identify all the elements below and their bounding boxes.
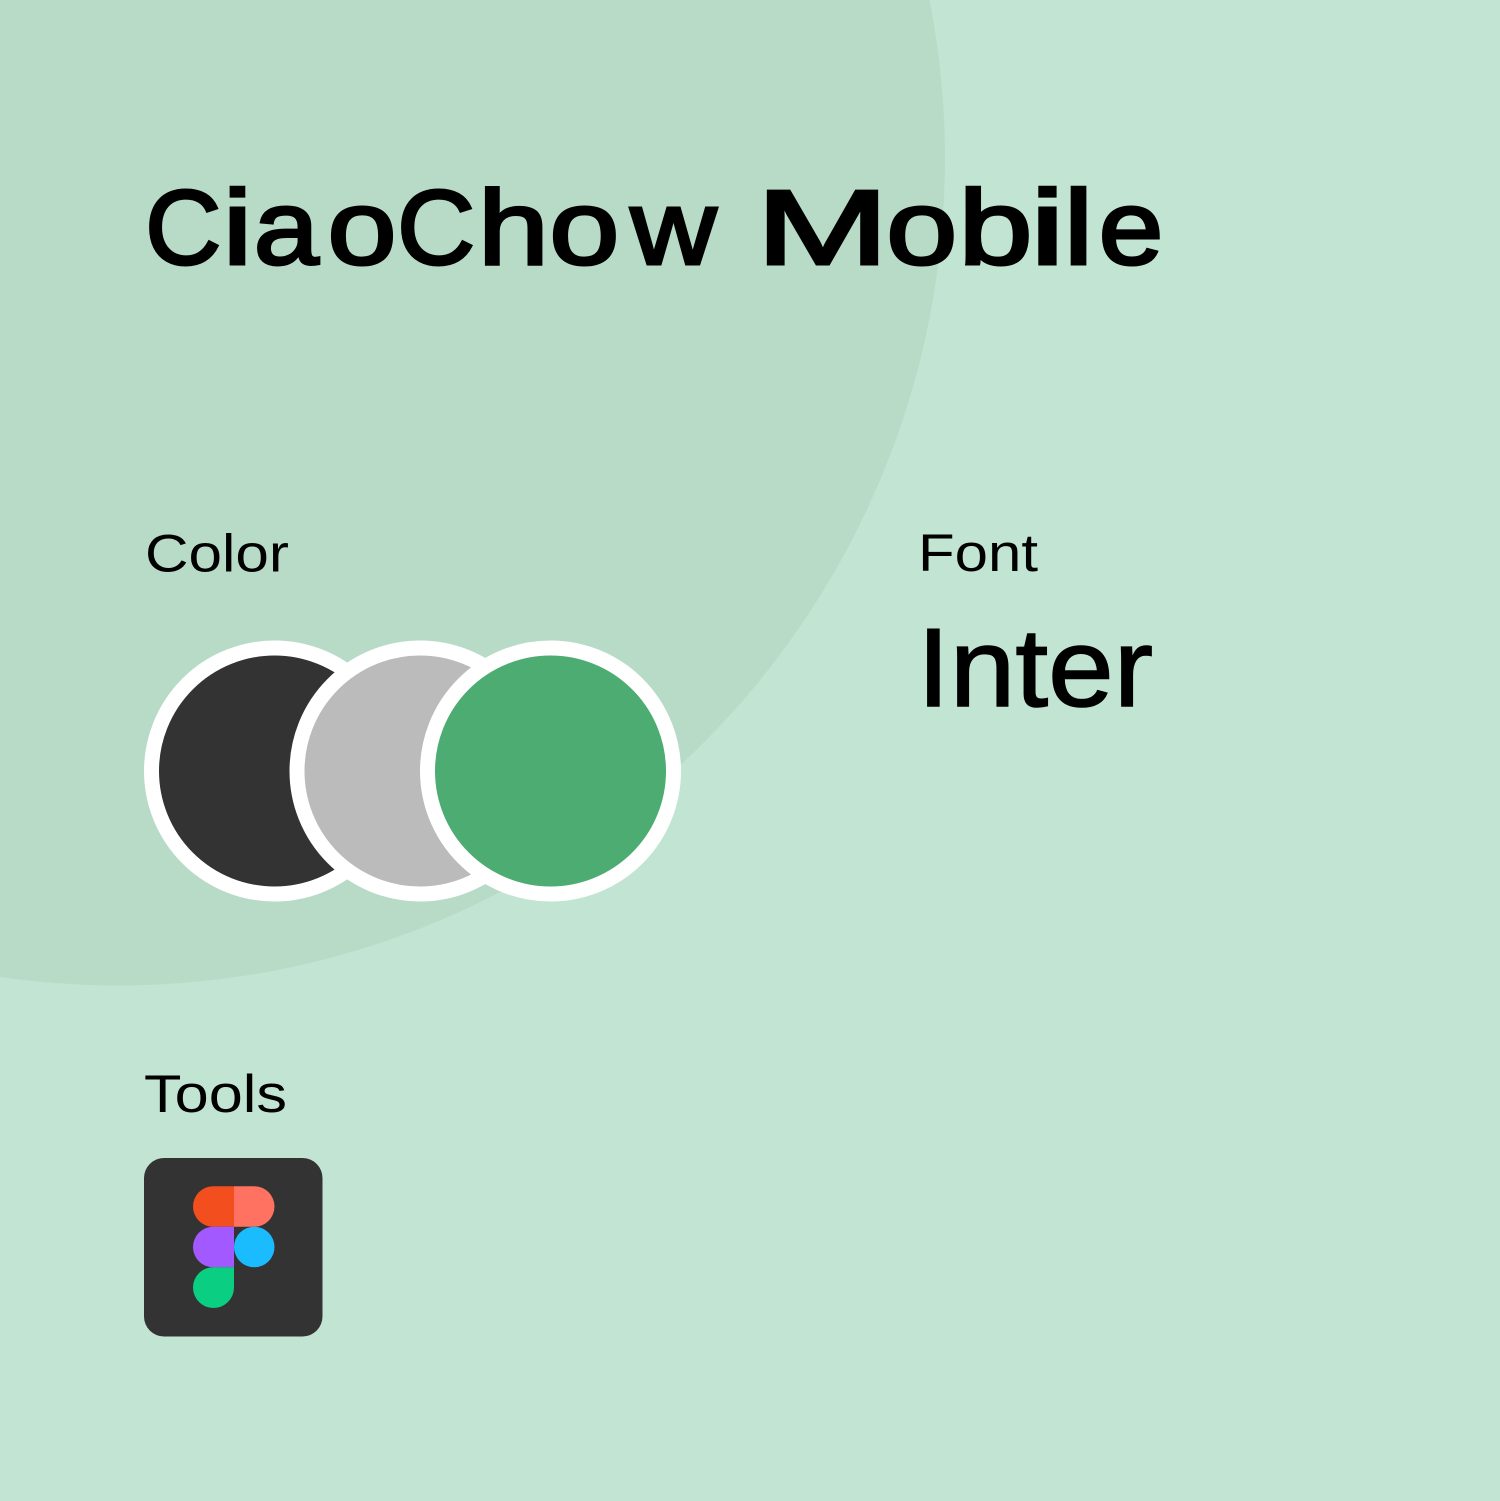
background circle — [0, 0, 945, 986]
title: h — [478, 169, 549, 287]
title: b — [958, 169, 1032, 287]
swatch: light gray — [297, 648, 543, 894]
swatch: dark gray — [152, 648, 398, 894]
heading: tools: Tools — [144, 1065, 287, 1124]
icon: figma — [144, 1158, 322, 1336]
title: M — [756, 169, 889, 287]
title: o — [886, 169, 957, 287]
color swatches — [152, 648, 674, 894]
title: o — [328, 169, 396, 287]
title: i — [222, 169, 252, 287]
heading: font: Font — [918, 524, 1038, 583]
title: a — [254, 169, 319, 287]
title: C — [145, 169, 221, 287]
title: o — [549, 169, 619, 287]
title: e — [1099, 169, 1163, 287]
title: w — [629, 169, 717, 287]
swatch: green — [428, 648, 674, 894]
title: l — [1064, 169, 1094, 287]
title: i — [1030, 169, 1065, 287]
font name: Inter — [917, 606, 1153, 730]
title: C — [397, 169, 475, 287]
heading: color: Color — [145, 524, 289, 584]
